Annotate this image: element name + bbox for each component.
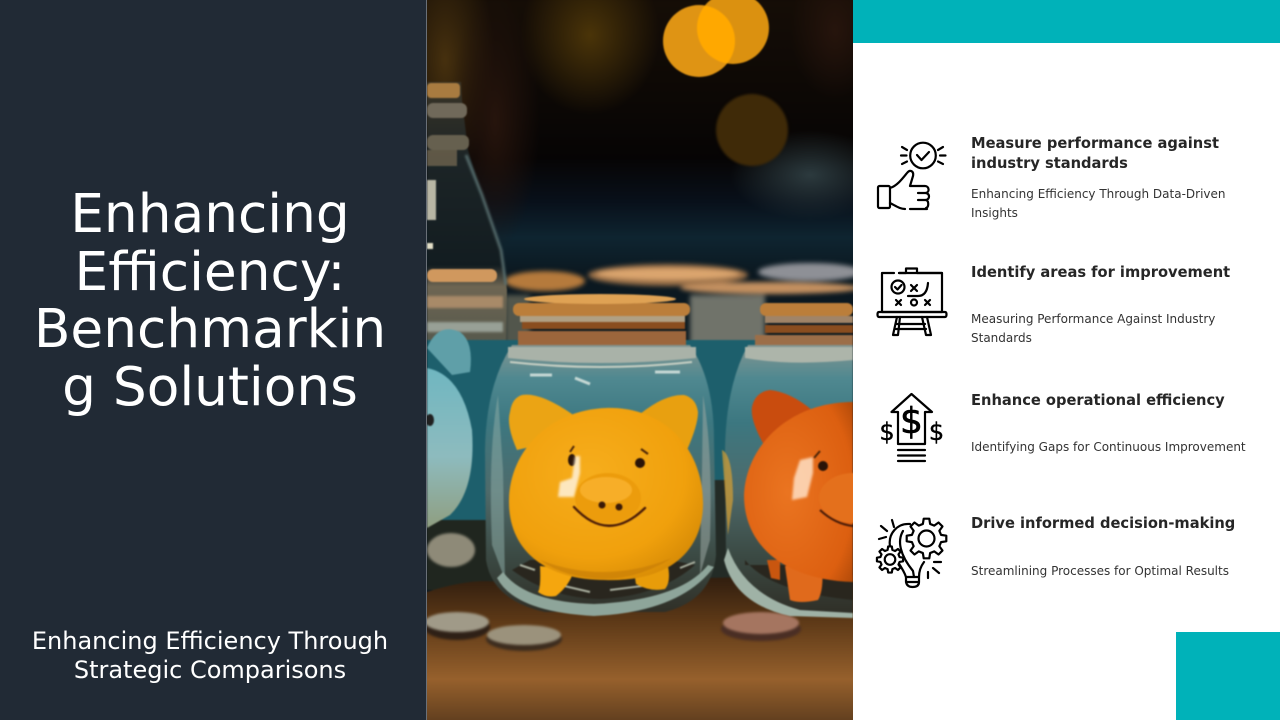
orange piggy bank [743,389,853,603]
bokeh lights [663,0,788,166]
yellow pig jar [485,294,716,616]
base layer under the soft focus [427,0,853,592]
teal top bar [853,0,1280,43]
panel: dark title panel [0,0,427,720]
title: Efficiency: [75,240,345,303]
title: Benchmarkin [34,297,386,360]
icon: upward arrow with dollar signs: $ [879,418,895,446]
teal backdrop behind jars [427,339,756,521]
heading: Enhance operational efficiency [971,392,1225,409]
heading: Identify areas for improvement [971,264,1230,281]
title [34,182,386,418]
item 2: identify areas [876,264,1230,345]
heading: Measure performance against industry standards [971,135,1219,172]
background coins [505,263,862,350]
subtitle: Strategic Comparisons [74,656,346,684]
description: Enhancing Efficiency Through Data-Driven Insights [971,187,1226,220]
yellow piggy bank [509,395,703,596]
description: Streamlining Processes for Optimal Results [971,564,1229,578]
background [427,0,853,592]
heading: Drive informed decision-making [971,515,1235,532]
table coins [424,612,801,651]
icon: upward arrow with dollar signs [879,392,944,462]
eyes [568,454,576,466]
jar rim and coin lid [513,303,690,316]
snout [575,473,641,523]
smile [574,507,645,526]
title: g Solutions [62,355,358,418]
item 3: enhance efficiency [879,392,1246,462]
blue piggy bank [426,329,473,528]
illustration: piggy banks in glass jars [427,0,853,720]
icon: strategy board on easel [876,267,948,336]
subtitle: Enhancing Efficiency Through [32,627,388,655]
subtitle [32,627,388,684]
title: Enhancing [70,182,350,245]
item 4: informed decisions [876,515,1235,588]
orange pig jar [722,303,853,618]
icon: upward arrow with dollar signs: $ [929,418,944,446]
table [427,575,853,720]
teal corner block [1176,632,1280,720]
glossy highlight [558,456,580,497]
item 1: measure performance [876,135,1226,220]
description: Measuring Performance Against Industry Standards [971,312,1215,345]
coins in left jar [427,533,475,567]
icon: upward arrow with dollar signs: $ [900,401,923,442]
icon: light bulb with gears [876,518,948,588]
description: Identifying Gaps for Continuous Improvement [971,440,1246,454]
coins in yellow jar [512,560,695,599]
left bottle [427,82,507,345]
icon: thumbs up with check badge [876,142,947,210]
